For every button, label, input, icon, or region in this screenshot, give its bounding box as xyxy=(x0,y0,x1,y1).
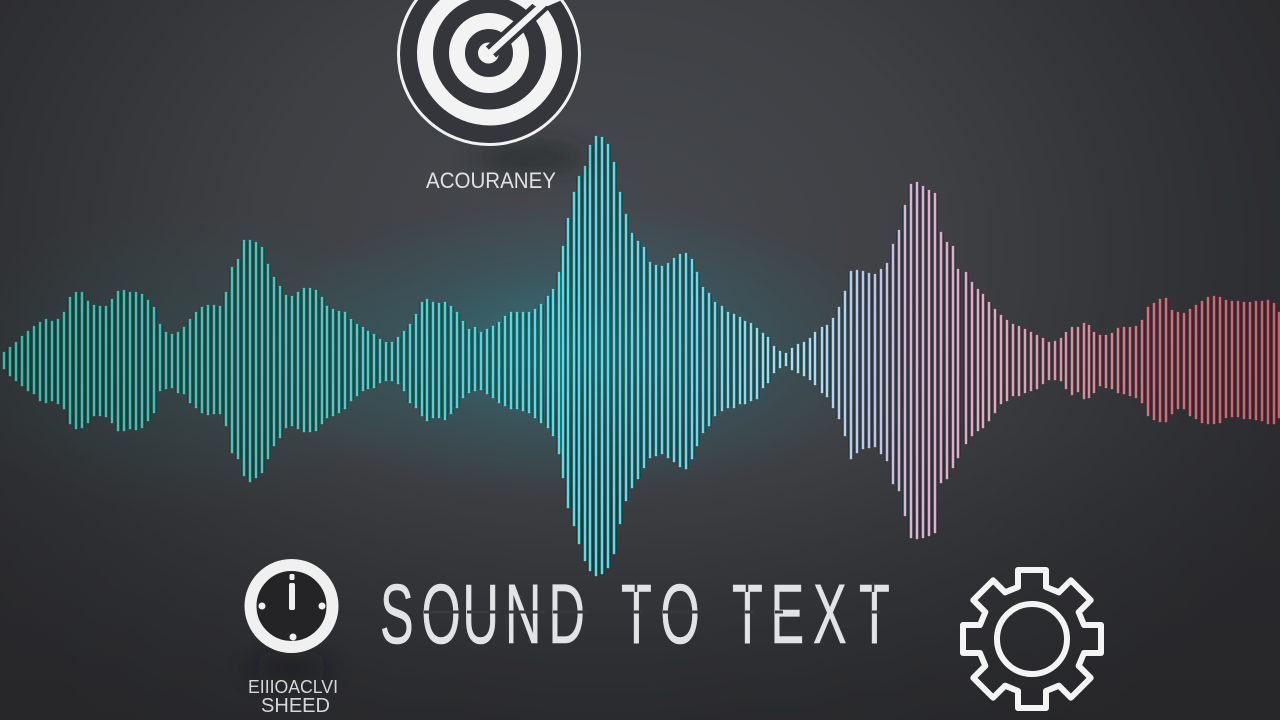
label: speed xyxy=(248,677,338,717)
waveform: sound wave from teal to coral xyxy=(4,137,1279,575)
label: accuracy: ACOURANEY xyxy=(426,168,556,193)
label: speed: EIIIOACLVI xyxy=(248,677,338,697)
icon: settings gear xyxy=(963,570,1101,708)
label: speed: SHEED xyxy=(261,695,330,717)
icon: speed clock xyxy=(250,565,332,678)
icon: accuracy target with arrow xyxy=(398,0,585,170)
title: sound to text: SOUNDTOTEXT xyxy=(380,567,890,661)
